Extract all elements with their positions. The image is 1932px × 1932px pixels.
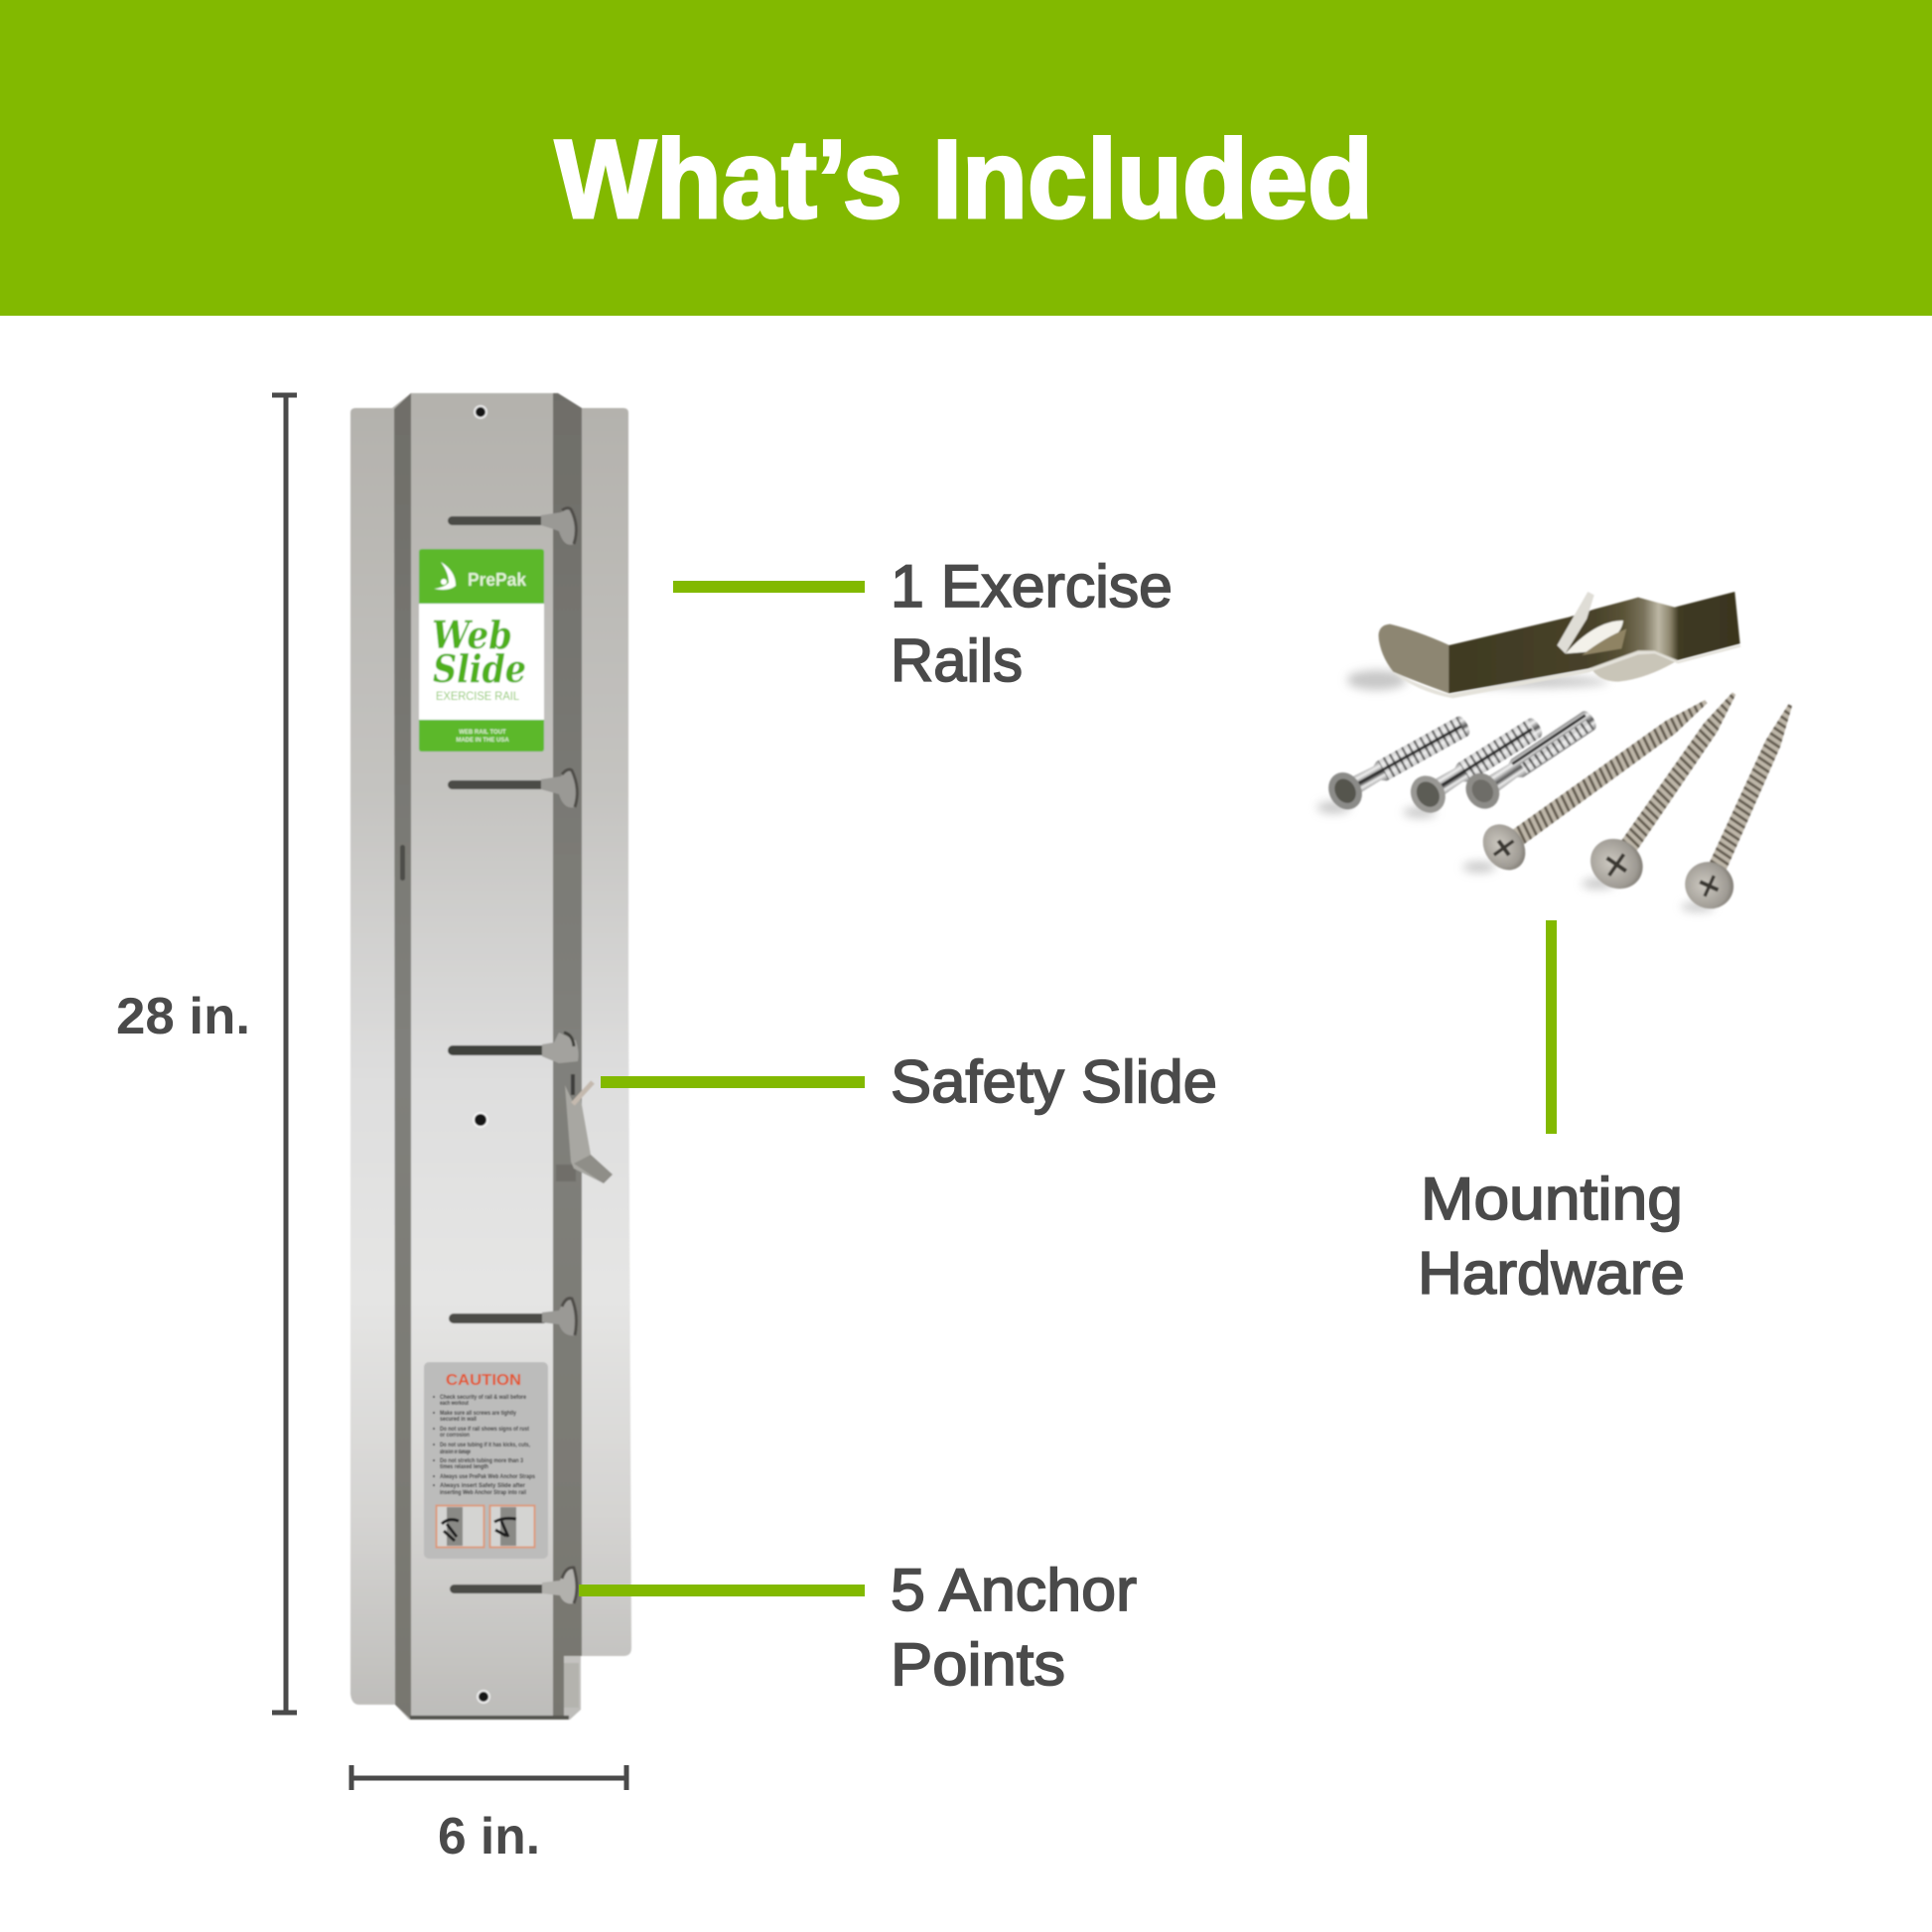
hardware items bbox=[1322, 592, 1813, 916]
product name bbox=[432, 613, 526, 691]
bottom mounting hole bbox=[477, 1690, 490, 1704]
caution diagrams bbox=[437, 1505, 534, 1547]
safety slide bbox=[556, 1074, 613, 1183]
caution rules: Check security of rail & wall before bbox=[440, 1395, 527, 1401]
anchor slot 1 bbox=[448, 508, 576, 545]
callout line: safety slide bbox=[601, 1076, 865, 1088]
anchor slot 4 bbox=[449, 1299, 576, 1335]
caution bullets bbox=[433, 1396, 435, 1486]
caution rules: inserting Web Anchor Strap into rail bbox=[440, 1490, 526, 1496]
caution rules: abrasion or damage bbox=[440, 1449, 471, 1455]
product name: Slide bbox=[433, 646, 526, 691]
height dimension bracket bbox=[272, 395, 297, 1713]
caution rules: Do not stretch tubing more than 3 bbox=[440, 1458, 524, 1464]
title: What’s Included bbox=[555, 117, 1373, 241]
label: anchor points bbox=[891, 1557, 1137, 1698]
screw 2 bbox=[1581, 678, 1756, 898]
wall anchor 2 bbox=[1404, 709, 1549, 819]
product label bbox=[419, 549, 544, 752]
mounting hardware photo bbox=[1317, 592, 1813, 916]
caution rules bbox=[440, 1395, 536, 1496]
shadows bbox=[1317, 670, 1715, 911]
label footer text: WEB RAIL TOUT bbox=[459, 730, 506, 736]
label: exercise rails: 1 Exercise bbox=[891, 553, 1173, 620]
label: mounting hardware bbox=[1418, 1166, 1685, 1307]
exercise rail bbox=[350, 393, 631, 1720]
caution rules: Always insert Safety Slide after bbox=[440, 1483, 526, 1489]
label: mounting hardware: Mounting bbox=[1421, 1166, 1683, 1232]
caution rules: times relaxed length bbox=[440, 1464, 488, 1470]
caution rules: Make sure all screws are tightly bbox=[440, 1411, 517, 1417]
callout line: exercise rails bbox=[673, 581, 865, 593]
top mounting hole bbox=[474, 405, 487, 419]
caution rules: Do not use tubing if it has kicks, cuts, bbox=[440, 1443, 530, 1449]
caution rules: Do not use if rail shows signs of rust bbox=[440, 1427, 529, 1433]
callout line: mounting hardware bbox=[1546, 920, 1557, 1134]
caution rules: secured in wall bbox=[440, 1417, 477, 1423]
label: anchor points: 5 Anchor bbox=[891, 1557, 1137, 1623]
header banner bbox=[0, 0, 1932, 316]
wall clip bbox=[1378, 592, 1740, 698]
label: safety slide: Safety Slide bbox=[891, 1048, 1217, 1115]
label footer text bbox=[456, 730, 509, 744]
caution heading: CAUTION bbox=[446, 1372, 521, 1389]
label: mounting hardware: Hardware bbox=[1418, 1240, 1685, 1307]
rail side channels bbox=[394, 393, 582, 1720]
caution rules: or corrosion bbox=[440, 1433, 470, 1439]
width dimension bracket bbox=[351, 1765, 626, 1790]
product subtitle: EXERCISE RAIL bbox=[436, 689, 519, 703]
product name: Web bbox=[432, 613, 512, 657]
label: exercise rails: Rails bbox=[891, 627, 1023, 694]
anchor slot 3 bbox=[448, 1033, 579, 1063]
screw 3 bbox=[1678, 695, 1813, 916]
anchor slot 5 bbox=[450, 1568, 577, 1603]
anchor slot 2 bbox=[448, 769, 577, 807]
small side slot bbox=[400, 845, 405, 881]
rail body bbox=[350, 393, 631, 1720]
screw 1 bbox=[1474, 682, 1721, 879]
width label: 6 in. bbox=[438, 1808, 540, 1865]
label footer text: MADE IN THE USA bbox=[456, 738, 509, 744]
label: exercise rails bbox=[891, 553, 1173, 694]
wall anchor 3 bbox=[1459, 702, 1603, 815]
brand logo mark bbox=[434, 562, 456, 590]
center mounting hole bbox=[473, 1112, 488, 1128]
caution rules: each workout bbox=[440, 1401, 469, 1407]
caution sticker bbox=[424, 1362, 548, 1559]
label: anchor points: Points bbox=[891, 1631, 1065, 1698]
caution rules: Always use PrePak Web Anchor Straps bbox=[440, 1474, 536, 1480]
brand name: PrePak bbox=[468, 570, 527, 590]
wall anchor 1 bbox=[1322, 707, 1476, 815]
callout line: anchor points bbox=[579, 1585, 865, 1596]
height label: 28 in. bbox=[116, 988, 250, 1045]
